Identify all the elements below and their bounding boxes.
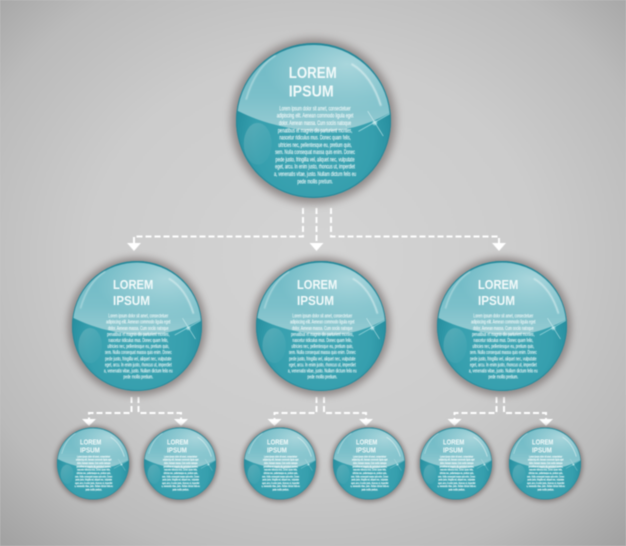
small circle 3: dolor. Aenean massa. Cum sociis natoque <box>264 461 298 465</box>
middle circle center: ultricies nec, pellentesque eu, pretium quis, <box>291 344 353 350</box>
small circle 2: eget, arcu. In enim justo, rhoncus ut, imperdiet <box>162 481 199 485</box>
arrowhead center <box>310 243 324 251</box>
small circle 4: pede mollis pretium. <box>361 488 378 492</box>
small circle 6: pede justo, fringilla vel, aliquet nec, vulputate <box>527 478 564 482</box>
small circle 1 <box>55 426 131 502</box>
small circle 1: nascetur ridiculus mus. Donec quam felis, <box>77 468 110 472</box>
middle circle center: a, venenatis vitae, justo. Nullam dictum felis eu <box>288 369 357 375</box>
middle circle center: nascetur ridiculus mus. Donec quam felis, <box>292 338 352 344</box>
top circle: pede mollis pretium. <box>297 179 333 185</box>
small circle 1: pede mollis pretium. <box>85 488 102 492</box>
middle circle right: penatibus et magnis dis parturient montes, <box>472 332 535 338</box>
small circle 6 <box>507 426 583 502</box>
top circle: a, venenatis vitae, justo. Nullam dictum felis eu <box>274 172 356 178</box>
small circle 1: dolor. Aenean massa. Cum sociis natoque <box>77 461 111 465</box>
small circle 1: sem. Nulla consequat massa quis enim. Donec <box>75 474 113 478</box>
top circle: penatibus et magnis dis parturient montes, <box>278 128 352 134</box>
middle circle center: penatibus et magnis dis parturient montes, <box>291 332 354 338</box>
small circle 3 <box>242 426 318 502</box>
middle circle right: ultricies nec, pellentesque eu, pretium quis, <box>472 344 534 350</box>
connectors: top circle to middle row <box>127 208 499 251</box>
small circle 1: ultricies nec, pellentesque eu, pretium quis, <box>77 471 111 475</box>
small circle 4: sem. Nulla consequat massa quis enim. Donec <box>351 474 389 478</box>
middle circle center: pede justo, fringilla vel, aliquet nec, vulputate <box>289 356 356 362</box>
middle circle left: pede mollis pretium. <box>123 375 153 381</box>
middle circle right: pede justo, fringilla vel, aliquet nec, vulputate <box>470 356 537 362</box>
small circle 5: pede justo, fringilla vel, aliquet nec, vulputate <box>438 478 475 482</box>
middle circle left: sem. Nulla consequat massa quis enim. Donec <box>105 350 172 356</box>
small circle 1: LOREM <box>80 437 101 446</box>
small circle 5: a, venenatis vitae, justo. Nullam dictum felis eu <box>438 484 476 488</box>
small circle 3: eget, arcu. In enim justo, rhoncus ut, imperdiet <box>262 481 299 485</box>
small circle 4: nascetur ridiculus mus. Donec quam felis, <box>353 468 386 472</box>
small circle 1: adipiscing elit. Aenean commodo ligula eget <box>76 458 112 462</box>
middle circle left: LOREM <box>113 277 153 292</box>
middle circle right: LOREM <box>478 277 518 292</box>
small circle 6: adipiscing elit. Aenean commodo ligula eget <box>528 458 564 462</box>
small circle 6: a, venenatis vitae, justo. Nullam dictum felis eu <box>527 484 565 488</box>
small circle 3: LOREM <box>267 437 288 446</box>
small circle 5: adipiscing elit. Aenean commodo ligula eget <box>439 458 475 462</box>
middle circle center <box>252 258 390 396</box>
middle circle right: sem. Nulla consequat massa quis enim. Donec <box>470 350 537 356</box>
small circle 1: pede justo, fringilla vel, aliquet nec, vulputate <box>75 478 112 482</box>
middle circle right: a, venenatis vitae, justo. Nullam dictum felis eu <box>469 369 538 375</box>
small circle 6: nascetur ridiculus mus. Donec quam felis, <box>529 468 562 472</box>
top circle: dolor. Aenean massa. Cum sociis natoque <box>279 121 351 127</box>
middle circle left: IPSUM <box>113 293 150 308</box>
middle circle left: nascetur ridiculus mus. Donec quam felis, <box>108 338 168 344</box>
small circle 1: a, venenatis vitae, justo. Nullam dictum felis eu <box>75 484 113 488</box>
middle circle right: Lorem ipsum dolor sit amet, consectetuer <box>473 314 533 320</box>
top circle: pede justo, fringilla vel, aliquet nec, vulputate <box>276 157 355 163</box>
small circle 5: pede mollis pretium. <box>448 488 465 492</box>
small circle 4: ultricies nec, pellentesque eu, pretium quis, <box>353 471 387 475</box>
small circle 4: penatibus et magnis dis parturient montes, <box>352 464 387 468</box>
top circle: IPSUM <box>289 83 334 100</box>
middle circle center: dolor. Aenean massa. Cum sociis natoque <box>292 326 353 332</box>
middle circle center: pede mollis pretium. <box>307 375 337 381</box>
small circle 5: LOREM <box>443 437 464 446</box>
small circle 4: dolor. Aenean massa. Cum sociis natoque <box>353 461 387 465</box>
middle circle right: nascetur ridiculus mus. Donec quam felis, <box>473 338 533 344</box>
small circle 6: sem. Nulla consequat massa quis enim. Donec <box>527 474 565 478</box>
small circle 5: eget, arcu. In enim justo, rhoncus ut, imperdiet <box>438 481 475 485</box>
small circle 5: dolor. Aenean massa. Cum sociis natoque <box>440 461 474 465</box>
small circle 1: eget, arcu. In enim justo, rhoncus ut, imperdiet <box>75 481 112 485</box>
small circle 3: Lorem ipsum dolor sit amet, consectetuer <box>264 454 297 458</box>
small circle 4: LOREM <box>356 437 377 446</box>
small circle 6: IPSUM <box>532 446 552 455</box>
middle circle right: pede mollis pretium. <box>488 375 518 381</box>
connectors: right middle circle to small circles <box>448 397 553 426</box>
small circle 6: dolor. Aenean massa. Cum sociis natoque <box>529 461 563 465</box>
top circle: Lorem ipsum dolor sit amet, consectetuer <box>279 106 351 112</box>
small circle 3: a, venenatis vitae, justo. Nullam dictum felis eu <box>262 484 300 488</box>
middle circle left <box>68 258 206 396</box>
small circle 1: IPSUM <box>80 446 100 455</box>
small circle 2: nascetur ridiculus mus. Donec quam felis, <box>164 468 197 472</box>
small circle 3: ultricies nec, pellentesque eu, pretium quis, <box>264 471 298 475</box>
middle circle left: pede justo, fringilla vel, aliquet nec, vulputate <box>105 356 172 362</box>
small circle 2: penatibus et magnis dis parturient montes, <box>163 464 198 468</box>
small circle 2: dolor. Aenean massa. Cum sociis natoque <box>164 461 198 465</box>
small circle 3: sem. Nulla consequat massa quis enim. Donec <box>262 474 300 478</box>
small circle 4: a, venenatis vitae, justo. Nullam dictum felis eu <box>351 484 389 488</box>
middle circle left: Lorem ipsum dolor sit amet, consectetuer <box>108 314 168 320</box>
middle circle right: dolor. Aenean massa. Cum sociis natoque <box>473 326 534 332</box>
small circle 3: IPSUM <box>267 446 287 455</box>
small circle 3: nascetur ridiculus mus. Donec quam felis, <box>264 468 297 472</box>
connectors: center middle circle to small circles <box>268 397 373 426</box>
middle circle center: LOREM <box>297 277 337 292</box>
small circle 2: sem. Nulla consequat massa quis enim. Donec <box>162 474 200 478</box>
small circle 4 <box>331 426 407 502</box>
top circle: ultricies nec, pellentesque eu, pretium quis, <box>278 143 352 149</box>
small circle 5 <box>418 426 494 502</box>
small circle 4: IPSUM <box>356 446 376 455</box>
small circle 2: ultricies nec, pellentesque eu, pretium quis, <box>164 471 198 475</box>
middle circle left: eget, arcu. In enim justo, rhoncus ut, imperdiet <box>105 362 172 368</box>
small circle 2: Lorem ipsum dolor sit amet, consectetuer <box>164 454 197 458</box>
small circle 2 <box>142 426 218 502</box>
small circle 2: adipiscing elit. Aenean commodo ligula eget <box>163 458 199 462</box>
middle circle center: adipiscing elit. Aenean commodo ligula eget <box>290 320 355 326</box>
small circle 6: eget, arcu. In enim justo, rhoncus ut, imperdiet <box>527 481 564 485</box>
small circle 4: Lorem ipsum dolor sit amet, consectetuer <box>353 454 386 458</box>
top circle: nascetur ridiculus mus. Donec quam felis, <box>279 136 351 142</box>
small circle 5: IPSUM <box>443 446 463 455</box>
small circle 3: pede mollis pretium. <box>272 488 289 492</box>
small circle 4: pede justo, fringilla vel, aliquet nec, vulputate <box>351 478 388 482</box>
middle circle right <box>433 258 571 396</box>
top circle: sem. Nulla consequat massa quis enim. Donec <box>275 150 355 156</box>
middle circle left: ultricies nec, pellentesque eu, pretium quis, <box>107 344 169 350</box>
small circle 4: eget, arcu. In enim justo, rhoncus ut, imperdiet <box>351 481 388 485</box>
connectors: left middle circle to small circles <box>82 397 188 426</box>
small circle 6: pede mollis pretium. <box>537 488 554 492</box>
middle circle left: dolor. Aenean massa. Cum sociis natoque <box>108 326 169 332</box>
small circle 2: LOREM <box>167 437 188 446</box>
middle circle right: IPSUM <box>478 293 515 308</box>
small circle 4: adipiscing elit. Aenean commodo ligula eget <box>352 458 388 462</box>
top circle <box>231 39 396 203</box>
arrowhead right <box>492 243 506 251</box>
small circle 5: penatibus et magnis dis parturient montes, <box>439 464 474 468</box>
middle circle left: a, venenatis vitae, justo. Nullam dictum felis eu <box>104 369 173 375</box>
middle circle center: IPSUM <box>297 293 334 308</box>
middle circle left: penatibus et magnis dis parturient montes, <box>107 332 170 338</box>
middle circle right: eget, arcu. In enim justo, rhoncus ut, imperdiet <box>470 362 537 368</box>
top circle: eget, arcu. In enim justo, rhoncus ut, imperdiet <box>275 165 355 171</box>
middle circle center: sem. Nulla consequat massa quis enim. Donec <box>289 350 356 356</box>
middle circle center: eget, arcu. In enim justo, rhoncus ut, imperdiet <box>289 362 356 368</box>
arrowhead left <box>127 243 141 251</box>
small circle 1: penatibus et magnis dis parturient montes, <box>76 464 111 468</box>
small circle 2: pede mollis pretium. <box>172 488 189 492</box>
small circle 6: ultricies nec, pellentesque eu, pretium quis, <box>529 471 563 475</box>
small circle 6: Lorem ipsum dolor sit amet, consectetuer <box>529 454 562 458</box>
small circle 2: pede justo, fringilla vel, aliquet nec, vulputate <box>162 478 199 482</box>
small circle 3: pede justo, fringilla vel, aliquet nec, vulputate <box>262 478 299 482</box>
small circle 5: sem. Nulla consequat massa quis enim. Donec <box>438 474 476 478</box>
top circle: adipiscing elit. Aenean commodo ligula eget <box>277 114 354 120</box>
top circle: LOREM <box>289 65 337 82</box>
small circle 5: nascetur ridiculus mus. Donec quam felis, <box>440 468 473 472</box>
middle circle center: Lorem ipsum dolor sit amet, consectetuer <box>292 314 352 320</box>
small circle 5: Lorem ipsum dolor sit amet, consectetuer <box>440 454 473 458</box>
middle circle left: adipiscing elit. Aenean commodo ligula eget <box>106 320 171 326</box>
small circle 6: penatibus et magnis dis parturient montes, <box>528 464 563 468</box>
small circle 3: penatibus et magnis dis parturient montes, <box>263 464 298 468</box>
small circle 6: LOREM <box>532 437 553 446</box>
middle circle right: adipiscing elit. Aenean commodo ligula eget <box>471 320 536 326</box>
small circle 2: a, venenatis vitae, justo. Nullam dictum felis eu <box>162 484 200 488</box>
small circle 2: IPSUM <box>167 446 187 455</box>
small circle 5: ultricies nec, pellentesque eu, pretium quis, <box>440 471 474 475</box>
small circle 3: adipiscing elit. Aenean commodo ligula eget <box>263 458 299 462</box>
small circle 1: Lorem ipsum dolor sit amet, consectetuer <box>77 454 110 458</box>
